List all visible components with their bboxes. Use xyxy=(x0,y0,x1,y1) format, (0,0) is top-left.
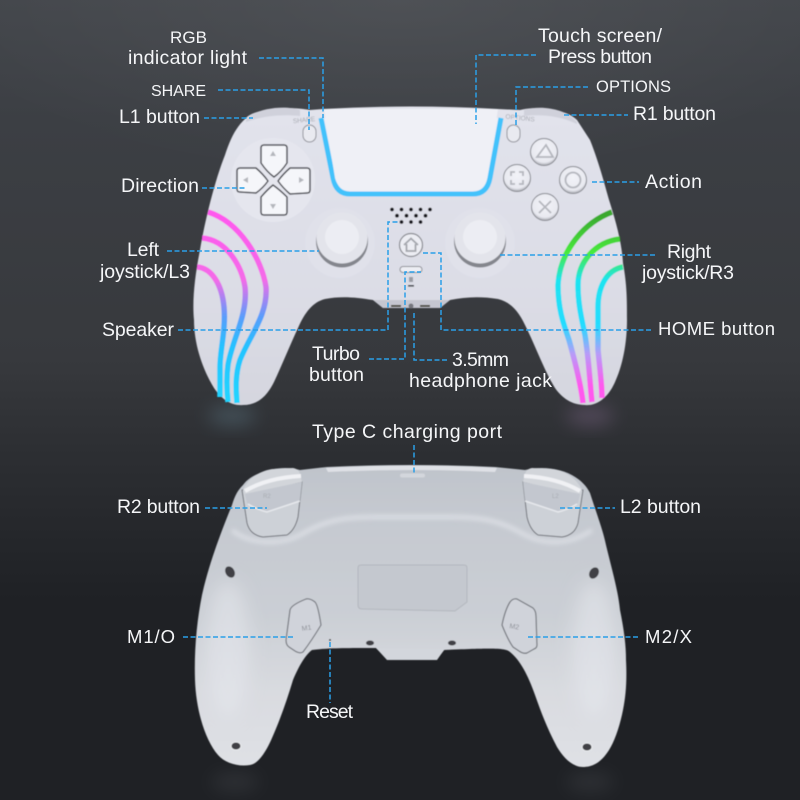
label: headphone jack xyxy=(409,349,552,392)
label: touch screen xyxy=(538,25,663,68)
back shading xyxy=(208,514,613,690)
label: touch screen: Touch screen/ xyxy=(538,25,663,47)
R2 trigger xyxy=(242,468,302,537)
front body xyxy=(193,106,627,405)
rear clip xyxy=(376,648,445,660)
label: HOME button: HOME button xyxy=(658,318,775,339)
label: SHARE: SHARE xyxy=(151,83,206,100)
M1 button: M1 xyxy=(301,625,312,633)
label: Right joystick xyxy=(641,241,734,284)
label: RGB indicator light: indicator light xyxy=(128,47,248,69)
back grip reflections xyxy=(211,773,614,791)
label: Type C charging port: Type C charging port xyxy=(312,421,503,443)
back body xyxy=(195,465,626,767)
action buttons xyxy=(504,138,586,220)
HOME button xyxy=(400,234,422,256)
label: Left joystick: joystick/L3 xyxy=(99,261,190,283)
label: Turbo button: button xyxy=(309,364,364,386)
L2 trigger xyxy=(523,468,583,537)
label: M1/O: M1/O xyxy=(127,626,175,647)
D-pad xyxy=(231,138,315,222)
shoulder buttons xyxy=(246,108,577,124)
bottom ports xyxy=(373,300,450,308)
touchpad xyxy=(321,109,501,194)
label: touch screen: Press button xyxy=(548,46,652,68)
R2 trigger: R2 xyxy=(263,494,271,500)
label: Left joystick xyxy=(99,239,190,283)
label: M2/X: M2/X xyxy=(645,626,692,647)
label: L1 button: L1 button xyxy=(119,106,200,128)
label: RGB indicator light xyxy=(128,28,248,69)
battery cover xyxy=(358,565,467,611)
front controller xyxy=(193,106,627,405)
label: Reset: Reset xyxy=(306,701,354,723)
labels xyxy=(99,25,775,723)
top edge port strip xyxy=(326,466,497,478)
label: Action: Action xyxy=(645,171,702,193)
speaker grille xyxy=(390,208,432,224)
OPTIONS button xyxy=(505,114,536,142)
left joystick xyxy=(305,208,375,278)
right joystick xyxy=(445,208,515,278)
left RGB stripes xyxy=(197,212,266,403)
turbo button xyxy=(400,266,422,287)
leader lines xyxy=(167,55,655,703)
SHARE button: SHARE xyxy=(293,116,316,125)
SHARE button xyxy=(293,116,316,142)
label: L2 button: L2 button xyxy=(620,496,701,518)
label: Right joystick: joystick/R3 xyxy=(641,262,734,284)
M2 button xyxy=(502,599,537,653)
label: Turbo button xyxy=(309,343,364,386)
label: Turbo button: Turbo xyxy=(312,343,360,365)
label: Direction: Direction xyxy=(121,175,199,197)
M2 button: M2 xyxy=(509,623,520,632)
label: Right joystick: Right xyxy=(667,241,712,263)
right RGB stripes xyxy=(558,212,623,403)
label: headphone jack: 3.5mm xyxy=(452,349,509,371)
label: Left joystick: Left xyxy=(127,239,160,261)
L2 trigger: L2 xyxy=(552,494,559,500)
back controller xyxy=(195,465,626,767)
label: R2 button: R2 button xyxy=(117,496,200,518)
label: R1 button: R1 button xyxy=(633,103,716,125)
label: RGB indicator light: RGB xyxy=(170,28,207,47)
label: headphone jack: headphone jack xyxy=(409,370,552,392)
label: Speaker: Speaker xyxy=(102,319,174,341)
front grip reflections xyxy=(208,406,614,426)
OPTIONS button: OPTIONS xyxy=(505,114,536,124)
screw holes xyxy=(223,565,601,751)
label: OPTIONS: OPTIONS xyxy=(596,78,671,96)
M1 button xyxy=(286,599,321,653)
